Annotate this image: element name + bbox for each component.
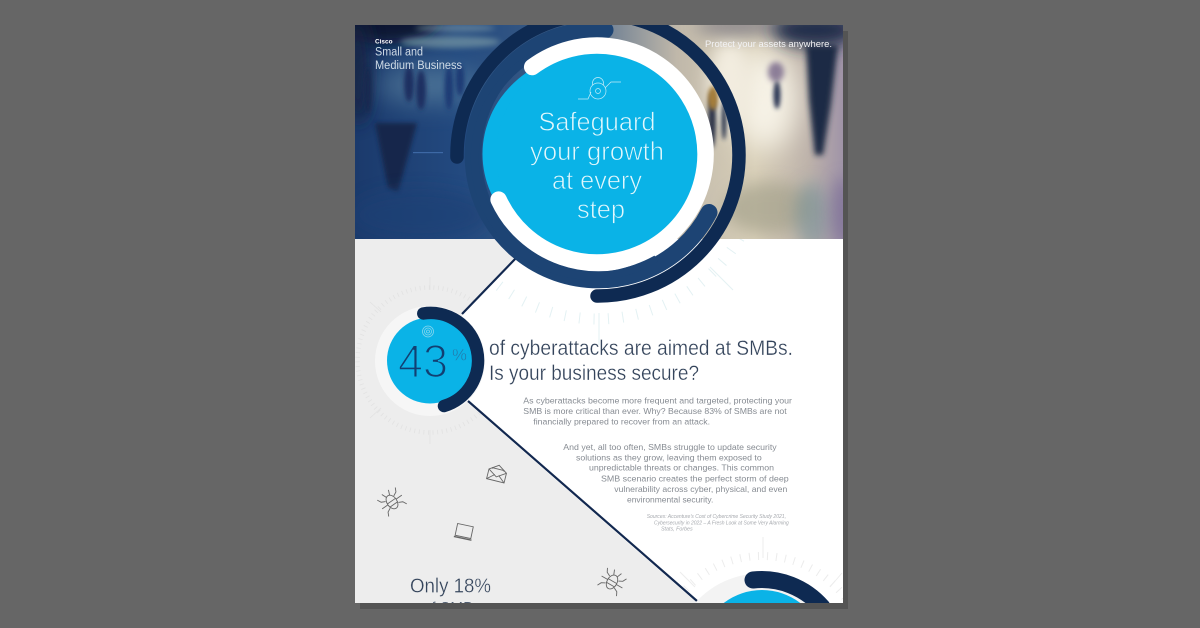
body paragraph 2: [563, 442, 789, 504]
cyan disc: [387, 318, 473, 404]
body paragraph 2: And yet, all too often, SMBs struggle to update security: [563, 442, 777, 452]
title: step: [577, 194, 625, 224]
title: [530, 107, 664, 224]
connector line: 43% circle to lower circle: [468, 401, 697, 601]
halo: [696, 574, 805, 603]
body paragraph 1: [523, 395, 792, 427]
heading: [489, 336, 793, 385]
light grey diagonal panel: [355, 239, 697, 603]
icon: laptop: [454, 523, 474, 540]
white ring: [499, 45, 706, 262]
page drop shadow: [360, 31, 848, 609]
brand label: [375, 39, 462, 69]
sources: Cybersecurity in 2022 – A Fresh Look at Some Very Alarming: [654, 520, 789, 526]
navy ring inner fill: [503, 65, 655, 271]
connector line: top circle to 43% circle: [462, 257, 517, 314]
cyan disc: [724, 590, 800, 603]
title: at every: [552, 165, 642, 195]
body paragraph 1: SMB is more critical than ever. Why? Because 83% of SMBs are not: [523, 406, 787, 416]
brand label: Medium Business: [375, 60, 462, 72]
heading: of cyberattacks are aimed at SMBs.: [489, 336, 793, 360]
icon: bug left: [377, 487, 407, 517]
icon: concentric target: [422, 326, 434, 337]
sources: [647, 514, 789, 533]
middle navy ring: [473, 30, 709, 280]
stat circle: lower, cropped by page edge: [695, 573, 829, 607]
body paragraph 2: solutions as they grow, leaving them exposed to: [576, 452, 762, 462]
sources: Stats, Forbes: [661, 527, 693, 533]
hero photo: blurred commuters: [355, 25, 843, 239]
percent sign: %: [452, 346, 467, 364]
cyan disc right fill: [602, 54, 682, 254]
body paragraph 2: SMB scenario creates the perfect storm of deep: [601, 473, 789, 483]
heading: Is your business secure?: [489, 361, 699, 385]
body paragraph 2: environmental security.: [627, 494, 713, 504]
stat circle: 43%: [375, 306, 485, 416]
dark arc: [423, 313, 478, 406]
brand label: Small and: [375, 46, 423, 58]
body paragraph 1: As cyberattacks become more frequent and targeted, protecting your: [523, 395, 792, 405]
brand label: Cisco: [375, 38, 393, 46]
stat heading: only 18%: [410, 578, 490, 603]
number 43: 43: [398, 335, 448, 387]
dial ticks: 43% circle: [356, 277, 480, 444]
hero dial: rings and cyan disc: [457, 14, 739, 296]
body paragraph 1: financially prepared to recover from an attack.: [533, 417, 710, 427]
body paragraph 2: vulnerability across cyber, physical, and even: [614, 484, 788, 494]
icon: open envelope: [487, 463, 508, 483]
cyan disc: [482, 72, 534, 195]
dial ticks: lower circle: [680, 537, 843, 600]
tagline: Protect your assets anywhere.: [705, 39, 832, 50]
outer dark ring: [457, 14, 739, 296]
body paragraph 2: unpredictable threats or changes. This common: [589, 463, 774, 473]
infographic page: [355, 25, 843, 603]
icon: bug right: [597, 568, 627, 596]
title: your growth: [530, 136, 664, 166]
title: Safeguard: [538, 107, 656, 137]
icon: padlock circuit: [578, 78, 621, 99]
sources: Sources: Accenture's Cost of Cybercrime Security Study 2021,: [647, 514, 786, 520]
halo: [375, 306, 485, 416]
dial ticks: main circle: [496, 239, 744, 345]
stat heading: only 18%: of SMBs: [423, 600, 481, 617]
dark arc: [753, 580, 822, 607]
stat heading: only 18%: Only 18%: [410, 575, 491, 598]
